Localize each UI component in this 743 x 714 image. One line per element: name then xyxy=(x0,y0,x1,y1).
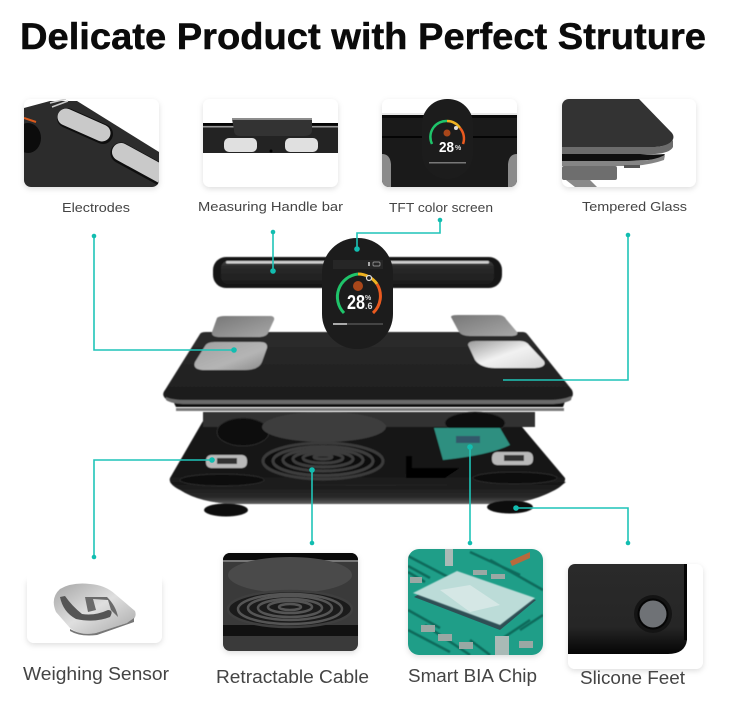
sub-element: gauge icon xyxy=(353,281,363,291)
label: silicone feet: Slicone Feet xyxy=(580,668,685,688)
label: measuring handle bar: Measuring Handle bar xyxy=(198,199,344,214)
panel: electrodes xyxy=(15,99,165,187)
connector: handle bar xyxy=(270,230,276,274)
icon: load cell xyxy=(54,584,136,636)
product: handle bar xyxy=(213,257,502,288)
sub-element: dark slot xyxy=(406,456,460,478)
label: retractable cable: Retractable Cable xyxy=(216,667,369,687)
sub-element: upper disc xyxy=(262,412,386,442)
panel: TFT color screen: % xyxy=(455,145,462,152)
connector: BIA chip xyxy=(467,444,473,545)
connector: tempered glass xyxy=(503,233,630,380)
sub-element: back-right electrode xyxy=(451,315,517,336)
panel: measuring handle bar xyxy=(203,99,338,187)
panel: retractable cable xyxy=(223,553,358,651)
label: electrodes: Electrodes xyxy=(62,200,131,215)
sub-element: left foot xyxy=(204,504,248,516)
panel: TFT color screen: 28 xyxy=(439,139,454,156)
label: TFT color screen: TFT color screen xyxy=(389,200,493,215)
product: lower tray xyxy=(170,412,566,516)
connector: electrodes xyxy=(92,234,237,353)
sub-element: left load cell xyxy=(206,455,247,468)
sub-element: circuit board xyxy=(434,428,510,460)
connector: retractable cable xyxy=(309,467,315,545)
sub-element: retractable cable coil xyxy=(263,443,383,479)
product: top glass plate xyxy=(163,315,573,411)
sub-element: status bar xyxy=(333,260,383,269)
panel: tempered glass xyxy=(562,99,696,187)
sub-element: reading: 28 xyxy=(347,292,365,314)
sub-element: percent sign: % xyxy=(365,295,372,302)
sub-element: back-left electrode xyxy=(212,316,274,337)
sub-element: right load cell xyxy=(492,452,533,465)
connector: TFT screen xyxy=(354,218,442,252)
label: tempered glass: Tempered Glass xyxy=(582,199,688,214)
sub-element: front-left electrode xyxy=(194,342,267,370)
panel: TFT color screen xyxy=(382,99,517,187)
label: weighing sensor: Weighing Sensor xyxy=(23,664,169,684)
sub-element: right foot xyxy=(487,500,533,514)
product: display screen xyxy=(322,238,393,349)
title: Delicate Product with Perfect Struture xyxy=(20,16,706,57)
sub-element: progress strip xyxy=(333,323,383,325)
sub-element: gauge marker xyxy=(366,276,372,280)
panel: silicone feet xyxy=(568,564,703,669)
connector: weighing sensor xyxy=(92,457,215,559)
sub-element: decimal: .6 xyxy=(365,301,373,311)
sub-element: internal speaker shapes xyxy=(180,412,557,486)
sub-element: gauge xyxy=(337,274,380,313)
label: smart BIA chip: Smart BIA Chip xyxy=(408,666,537,686)
connector: silicone feet xyxy=(513,505,630,545)
panel: smart BIA chip xyxy=(408,549,543,655)
sub-element: front-right electrode xyxy=(468,341,545,368)
panel: weighing sensor xyxy=(27,570,162,643)
